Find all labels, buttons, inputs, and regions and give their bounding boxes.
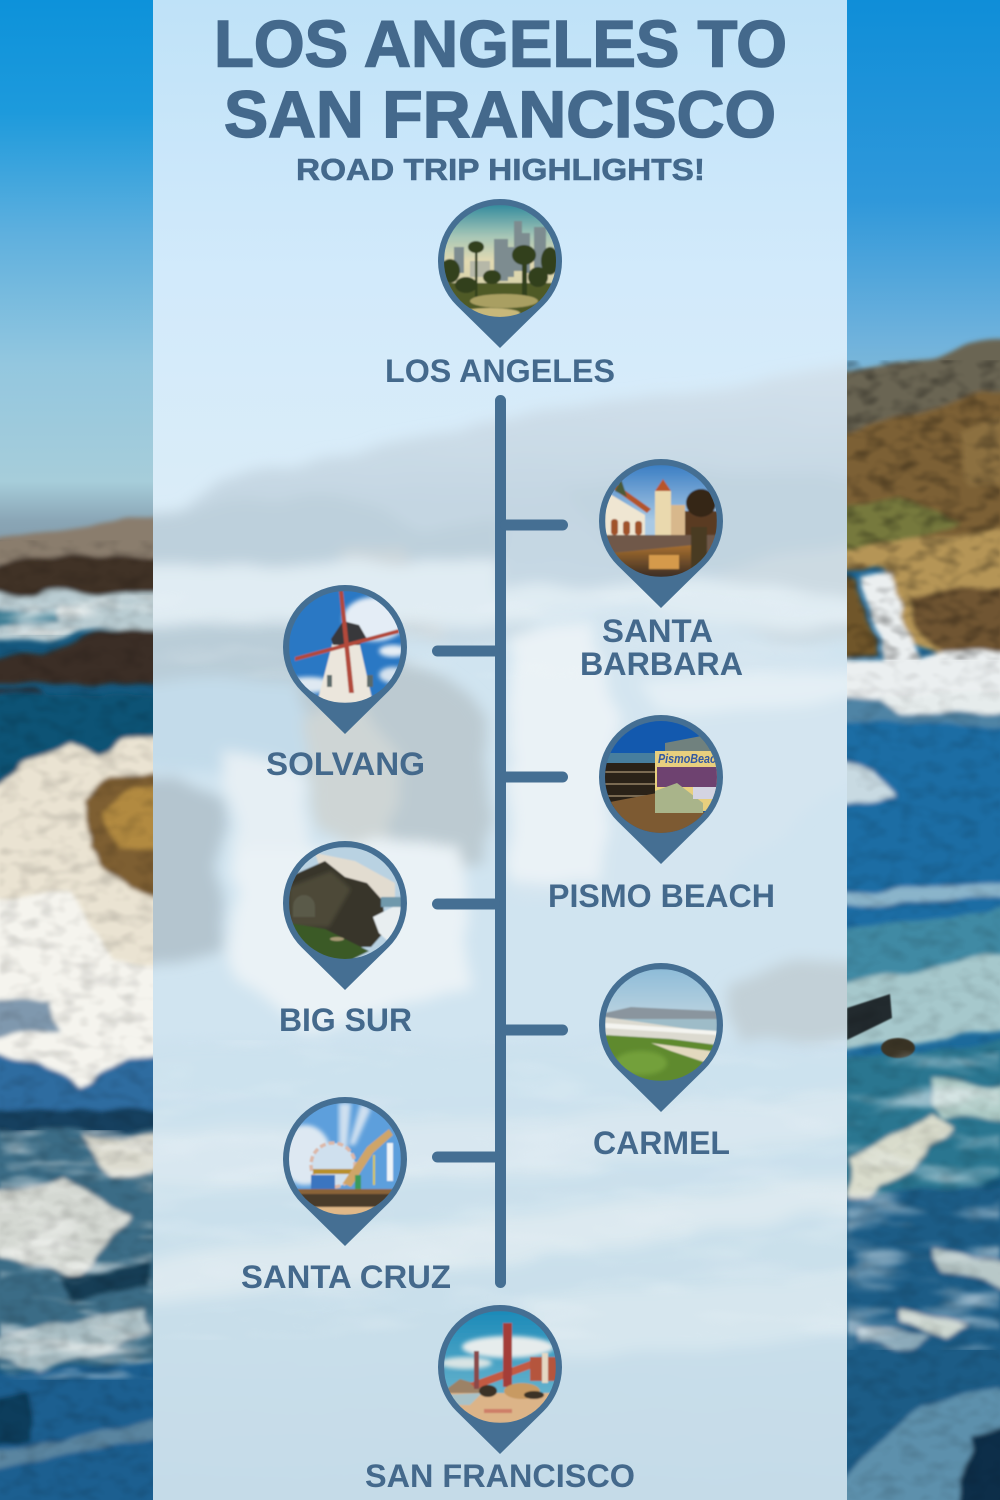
stop: Pismo Beach <box>548 715 775 914</box>
label: Los Angeles: LOS ANGELES <box>385 353 615 389</box>
pin: Big Sur cliffs <box>283 841 407 990</box>
pin: Los Angeles skyline <box>438 199 562 348</box>
label: Solvang: SOLVANG <box>266 746 425 782</box>
label: Big Sur: BIG SUR <box>279 1002 412 1038</box>
pin: Santa Barbara mission <box>599 459 723 608</box>
title: LOS ANGELES TO <box>214 6 787 80</box>
pin: Santa Cruz boardwalk <box>279 1097 407 1246</box>
stop: Santa Cruz <box>241 1097 451 1295</box>
pin: Golden Gate Bridge <box>438 1305 562 1454</box>
stop: Big Sur <box>279 841 412 1038</box>
stop: San Francisco <box>365 1305 635 1494</box>
stop: Solvang <box>266 585 425 782</box>
label: Santa Barbara: SANTA <box>602 613 713 649</box>
label: Pismo Beach: PISMO BEACH <box>548 878 775 914</box>
pin: Pismo Beach sign: PismoBeac <box>658 751 717 766</box>
label: Santa Barbara: BARBARA <box>580 646 743 682</box>
label: Carmel: CARMEL <box>593 1125 730 1161</box>
pin: Carmel beach <box>599 963 723 1112</box>
label: San Francisco: SAN FRANCISCO <box>365 1458 635 1494</box>
translucent central panel with hazy coast <box>130 0 870 1500</box>
route timeline <box>432 395 568 1288</box>
stop: Carmel <box>593 963 730 1161</box>
stop: Santa Barbara <box>580 459 743 682</box>
title: ROAD TRIP HIGHLIGHTS! <box>296 152 705 187</box>
pin: Solvang windmill <box>283 585 407 734</box>
label: Santa Barbara <box>580 613 743 682</box>
background photo, left strip: rocks and crashing wave <box>0 0 153 1500</box>
title: SAN FRANCISCO <box>224 77 776 151</box>
title <box>214 6 787 187</box>
background photo, right strip: headland and surf <box>830 0 1000 1500</box>
pin: Pismo Beach sign <box>599 715 723 864</box>
label: Santa Cruz: SANTA CRUZ <box>241 1259 451 1295</box>
stop: Los Angeles <box>385 199 615 389</box>
